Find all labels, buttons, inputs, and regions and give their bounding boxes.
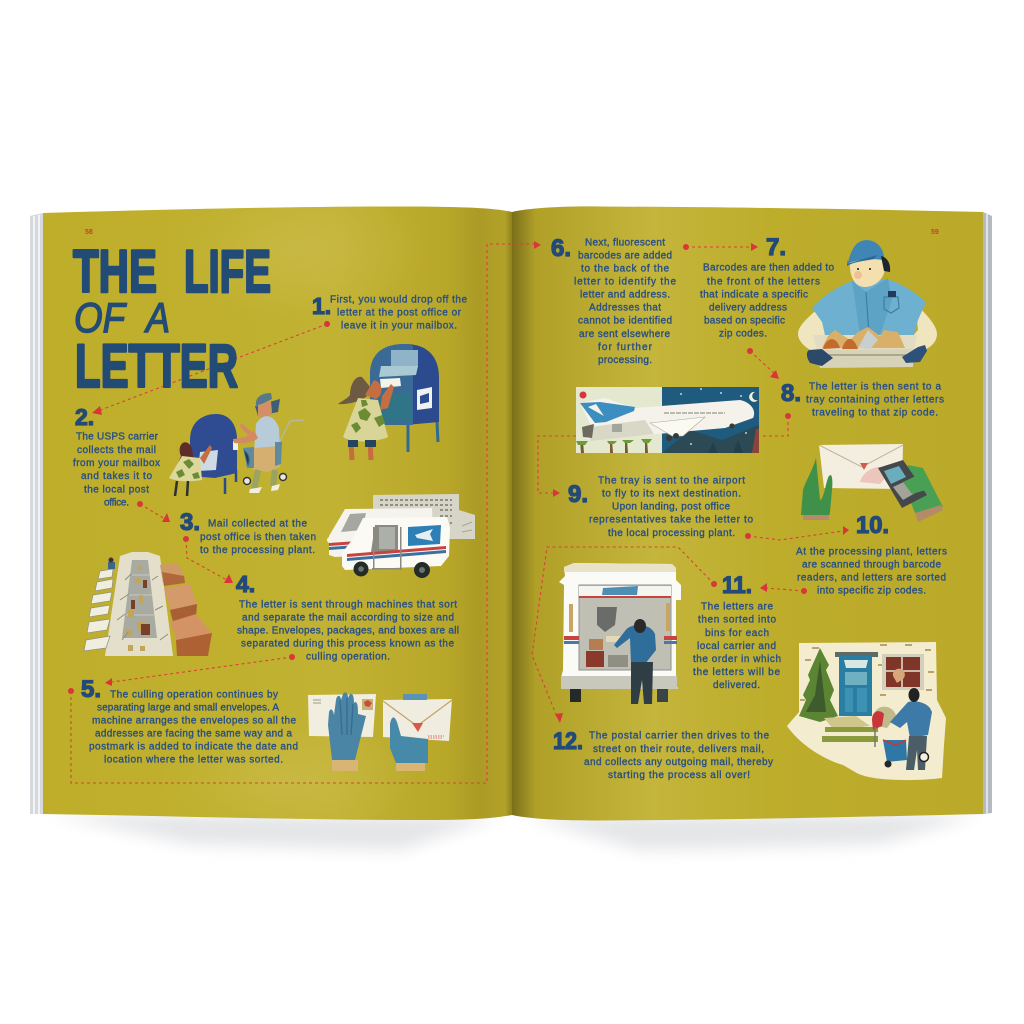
- step 1 number: 1.: [312, 293, 331, 319]
- step 6 text: Addresses that: [589, 302, 661, 314]
- dashed connector: step 1 to step 2: [92, 321, 330, 415]
- page number 58: 58: [85, 229, 93, 236]
- step 5 text: The culling operation continues by: [110, 690, 278, 700]
- right page: [512, 206, 983, 820]
- dashed connector: step 4 to step 5: [105, 654, 295, 686]
- step 6 text: are sent elsewhere: [579, 329, 670, 340]
- magazine page edges: [30, 212, 992, 814]
- step 1 text: letter at the post office or: [337, 308, 462, 318]
- step 11 text: [693, 602, 781, 691]
- step 5 text: machine arranges the envelopes so all the: [92, 716, 296, 726]
- dashed connector: step 9 to step 10: [745, 526, 849, 540]
- dashed connector: step 8 to step 9: [538, 413, 791, 497]
- step 5 text: separating large and small envelopes. A: [97, 702, 279, 714]
- step 2 number: 2.: [75, 404, 94, 430]
- cast shadow under the magazine: [50, 814, 980, 850]
- step 1 text: First, you would drop off the: [330, 294, 467, 306]
- step 6 number: 6.: [551, 235, 571, 262]
- step 12 text: [584, 730, 773, 781]
- step 11 text: then sorted into: [698, 614, 776, 626]
- step 4 text: and separate the mail according to size and: [242, 612, 454, 624]
- step 8 text: traveling to that zip code.: [812, 408, 938, 418]
- step 11 text: the order in which: [693, 654, 781, 665]
- step 2 text: the local post: [84, 484, 149, 496]
- illustration: carrier collecting from mailbox with child: [169, 393, 304, 496]
- step 4 text: The letter is sent through machines that sort: [239, 600, 457, 610]
- step 6 text: [574, 238, 676, 366]
- step 8 text: tray containing other letters: [806, 394, 944, 406]
- step 7 text: delivery address: [709, 302, 787, 314]
- step 5 number: 5.: [81, 676, 101, 703]
- illustration: child posting a letter at blue mailbox: [338, 344, 439, 460]
- step 2 text: office.: [104, 498, 129, 508]
- step 3 number: 3.: [180, 509, 200, 536]
- step 2 text: The USPS carrier: [76, 432, 159, 442]
- page number 59: 59: [931, 229, 939, 236]
- step 8 number: 8.: [781, 380, 801, 407]
- step 11 text: the letters will be: [693, 667, 780, 678]
- step 7 text: that indicate a specific: [700, 290, 808, 300]
- dashed connector: step 10 to step 11: [760, 583, 807, 594]
- step 3 text: Mail collected at the: [208, 518, 307, 530]
- step 6 text: barcodes are added: [578, 250, 672, 262]
- step 9 text: The tray is sent to the airport: [598, 476, 745, 486]
- step 7 text: based on specific: [704, 316, 785, 326]
- step 11 text: bins for each: [705, 628, 769, 639]
- title: A: [143, 294, 170, 341]
- step 3 text: to the processing plant.: [200, 545, 315, 556]
- title: OF: [74, 294, 127, 341]
- step 11 text: local carrier and: [697, 641, 776, 652]
- step 6 text: to the back of the: [581, 264, 669, 274]
- step 11 text: The letters are: [701, 602, 773, 612]
- step 5 text: addresses are facing the same way and a: [95, 728, 292, 740]
- illustration: scanning an envelope with barcode reader: [801, 444, 943, 522]
- step 8 text: The letter is then sent to a: [809, 382, 941, 392]
- step 6 text: cannot be identified: [578, 316, 672, 326]
- step 12 text: and collects any outgoing mail, thereby: [584, 757, 773, 768]
- title: [73, 238, 271, 400]
- step 5 text: location where the letter was sorted.: [104, 754, 283, 766]
- illustration: blue gloves holding letters: [308, 692, 452, 771]
- left page: [43, 180, 512, 840]
- illustration: postal worker carrying mail tray: [798, 240, 937, 368]
- step 10 text: are scanned through barcode: [802, 560, 941, 570]
- step 6 text: Next, fluorescent: [585, 238, 665, 248]
- step 3 text: post office is then taken: [200, 532, 316, 543]
- illustration: carrier delivering mail at house: [787, 642, 946, 780]
- step 2 text: and takes it to: [81, 471, 152, 482]
- step 4 text: shape. Envelopes, packages, and boxes are all: [237, 626, 459, 636]
- step 4 number: 4.: [236, 571, 255, 597]
- step 10 text: into specific zip codes.: [817, 586, 926, 596]
- illustration: sorting conveyor with boxes: [84, 552, 212, 656]
- illustration: mail trucks and processing plant: [327, 494, 475, 578]
- step 9 text: the local processing plant.: [608, 528, 735, 539]
- title: LETTER: [75, 332, 238, 400]
- step 7 number: 7.: [766, 234, 786, 261]
- step 10 number: 10.: [856, 512, 889, 539]
- step 4 text: culling operation.: [306, 652, 390, 662]
- title: LIFE: [184, 238, 271, 305]
- step 10 text: [796, 546, 947, 596]
- step 7 text: zip codes.: [719, 328, 767, 340]
- dashed connector: step 6 to step 7: [683, 243, 758, 251]
- step 9 number: 9.: [568, 481, 588, 508]
- step 10 text: At the processing plant, letters: [796, 546, 947, 558]
- step 11 text: delivered.: [713, 680, 760, 691]
- step 9 text: [589, 476, 753, 539]
- step 9 text: representatives take the letter to: [589, 514, 753, 526]
- title: THE: [73, 238, 157, 305]
- step 7 text: the front of the letters: [707, 276, 820, 288]
- dashed connector: step 11 to step 12: [532, 547, 717, 723]
- step 2 text: [73, 432, 160, 508]
- illustration: mail truck rear with carrier loading: [559, 563, 681, 704]
- step 12 text: street on their route, delivers mail,: [593, 744, 764, 755]
- step 9 text: to fly to its next destination.: [602, 488, 741, 500]
- step 3 text: [200, 518, 316, 556]
- step 2 text: from your mailbox: [73, 458, 160, 469]
- step 4 text: [237, 600, 459, 662]
- step 12 text: The postal carrier then drives to the: [589, 730, 769, 742]
- dashed connector: step 5 to step 6: [68, 241, 541, 783]
- step 5 text: [89, 690, 298, 766]
- step 6 text: for further: [598, 342, 653, 353]
- step 6 text: letter to identify the: [574, 276, 676, 288]
- step 6 text: letter and address.: [580, 290, 670, 300]
- step 9 text: Upon landing, post office: [612, 502, 730, 512]
- illustration: airplane panel: [576, 387, 759, 453]
- step 11 number: 11.: [722, 572, 752, 599]
- step 10 text: readers, and letters are sorted: [797, 572, 946, 584]
- step 12 text: starting the process all over!: [608, 770, 750, 781]
- step 4 text: separated during this process known as the: [241, 638, 454, 650]
- step 7 text: [700, 262, 834, 340]
- step 2 text: collects the mail: [77, 445, 156, 456]
- step 12 number: 12.: [553, 728, 583, 755]
- step 8 text: [806, 382, 944, 418]
- dashed connector: step 7 to step 8: [747, 348, 779, 379]
- step 7 text: Barcodes are then added to: [703, 262, 834, 274]
- dashed connector: step 2 to step 3: [137, 501, 170, 522]
- step 5 text: postmark is added to indicate the date and: [89, 742, 298, 752]
- step 1 text: [330, 294, 467, 332]
- step 6 text: processing.: [598, 355, 652, 366]
- step 1 text: leave it in your mailbox.: [341, 320, 457, 332]
- dashed connector: step 3 to step 4: [183, 536, 233, 583]
